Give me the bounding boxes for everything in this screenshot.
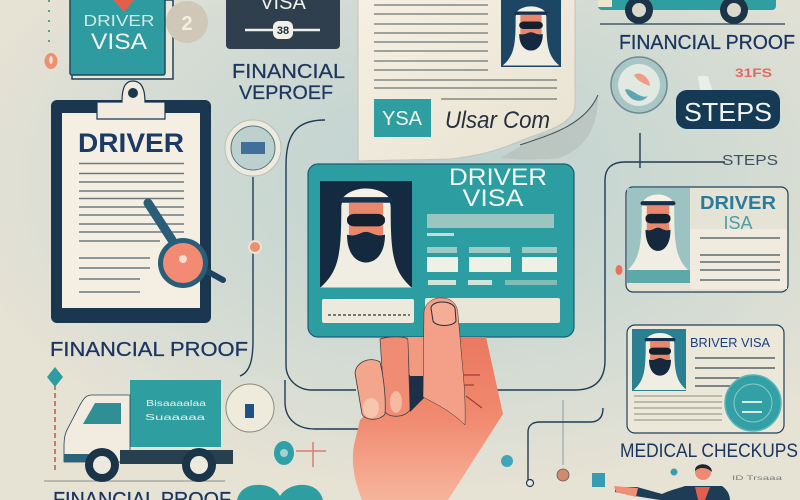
- numbered coin: [166, 1, 208, 43]
- index finger: [423, 298, 465, 425]
- teal book: driver visa: [70, 0, 173, 79]
- presenter figure: [614, 464, 730, 500]
- globe badge: [611, 57, 667, 113]
- signed document: Ulsar Com: [445, 107, 550, 134]
- delivery truck: [44, 380, 233, 482]
- heading: financial proof left: FINANCIAL PROOF: [50, 339, 248, 361]
- driver visa card bottom with seal: BRIVER VISA: [690, 335, 770, 350]
- numbered coin: 2: [181, 13, 193, 35]
- magnifying glass: [148, 203, 223, 288]
- little finger: [355, 360, 385, 419]
- delivery truck: Suaaaaa: [145, 413, 206, 422]
- red pin: [616, 265, 622, 275]
- heading: financial veproof: FINANCIAL: [232, 61, 345, 83]
- dark visa badge: 38: [277, 25, 289, 37]
- teal marker pole: [47, 367, 63, 472]
- signed document: [358, 0, 598, 161]
- connector lines: [240, 120, 725, 480]
- main driver visa card: [308, 164, 574, 337]
- signed document: YSA: [382, 108, 423, 130]
- small steps label: STEPS: [722, 152, 778, 169]
- driver visa card bottom with seal: [627, 325, 784, 433]
- main driver visa card: DRIVER: [449, 164, 547, 191]
- teal pin with cross: [274, 441, 326, 467]
- small logo label: ID Trsaaa: [732, 476, 783, 482]
- heading: financial veproof: VEPROEF: [239, 83, 333, 104]
- driver visa card right: [626, 187, 788, 292]
- teal book: driver visa: VISA: [91, 29, 147, 54]
- hand holding card: [353, 298, 503, 500]
- driver visa card right: ISA: [723, 213, 753, 233]
- dark visa badge: [226, 0, 340, 49]
- steps pill: STEPS: [684, 97, 772, 127]
- delivery truck: Bisaaaalaa: [146, 399, 207, 408]
- red small steps label: 31FS: [735, 66, 772, 80]
- heading: financial proof right: FINANCIAL PROOF: [619, 32, 795, 54]
- palm: [353, 337, 503, 500]
- gap between fingers: [408, 375, 424, 412]
- main driver visa card: VISA: [462, 185, 524, 212]
- middle fingers: [380, 337, 410, 416]
- steps pill: [676, 76, 780, 129]
- truck top right: [598, 0, 785, 24]
- heading: financial veproof: [232, 61, 345, 104]
- round badge with blue mark: [226, 384, 274, 432]
- teal book: driver visa: DRIVER: [84, 13, 154, 30]
- left dotted pin: [44, 0, 58, 69]
- small bottom markers: [501, 455, 678, 487]
- small round seal: [225, 120, 281, 176]
- teal heart: [237, 485, 323, 500]
- driver visa card right: DRIVER: [700, 193, 776, 213]
- clipboard: [51, 81, 211, 323]
- clipboard: DRIVER: [78, 128, 184, 158]
- red connector pin: [249, 241, 261, 253]
- knuckle creases: [464, 375, 482, 408]
